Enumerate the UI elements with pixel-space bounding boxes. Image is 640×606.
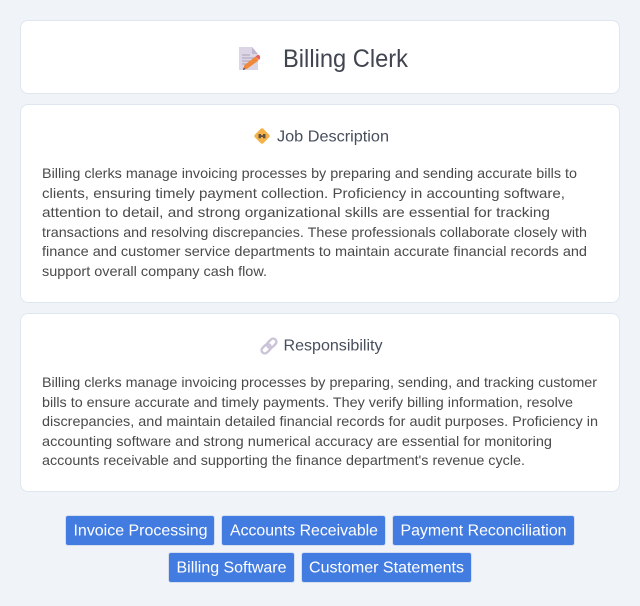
tag background: Customer Statements — [301, 552, 472, 583]
tag background: Billing Software — [168, 552, 295, 583]
panel: job description card — [20, 104, 620, 303]
tag label: Accounts Receivable: Accounts Receivable — [230, 522, 378, 540]
tag background: Invoice Processing — [65, 515, 215, 546]
text block: job description: support overall company cash flow. — [42, 263, 267, 279]
tag label: Billing Software: Billing Software — [176, 560, 287, 576]
text block: job description: transactions and resolving discrepancies. These professionals collaborate closely with — [42, 224, 587, 240]
heading: job description: Job Description — [277, 128, 389, 146]
text block: job description — [42, 165, 587, 279]
panel: responsibility card — [20, 313, 620, 492]
heading: responsibility: Responsibility — [284, 338, 382, 354]
text block: responsibility: accounting software and strong numerical accuracy are essential for monitoring — [42, 433, 552, 449]
tag label: Customer Statements: Customer Statements — [309, 560, 464, 576]
icon: job description diamond — [254, 128, 270, 144]
icon: document with pencil — [239, 47, 260, 70]
tag background: Payment Reconciliation — [392, 515, 575, 546]
text block: responsibility — [42, 374, 598, 468]
text block: job description: finance and customer service departments to maintain accurate financial records and — [42, 243, 587, 259]
text block: responsibility: discrepancies, and maintain detailed financial records for audit purposes. Proficiency in — [42, 413, 598, 429]
tag label: Invoice Processing: Invoice Processing — [74, 522, 208, 540]
text block: responsibility: Billing clerks manage invoicing processes by preparing, sending, and tracking customer — [42, 374, 597, 390]
title: Billing Clerk — [283, 45, 408, 73]
text block: responsibility: bills to ensure accurate and timely payments. They verify billing information, resolve — [42, 394, 573, 410]
tag label: Payment Reconciliation: Payment Reconciliation — [400, 522, 566, 540]
text block: job description: Billing clerks manage invoicing processes by preparing and sending accurate bills to — [42, 165, 577, 181]
text block: job description: attention to detail, and strong organizational skills are essential for tracking — [42, 204, 550, 220]
icon: chain link — [260, 337, 278, 355]
panel: title card — [20, 20, 620, 94]
text block: job description: clients, ensuring timely payment collection. Proficiency in accounting software, — [42, 185, 565, 201]
text block: responsibility: accounts receivable and supporting the finance department's revenue cycle. — [42, 452, 525, 468]
tag background: Accounts Receivable — [221, 515, 386, 546]
